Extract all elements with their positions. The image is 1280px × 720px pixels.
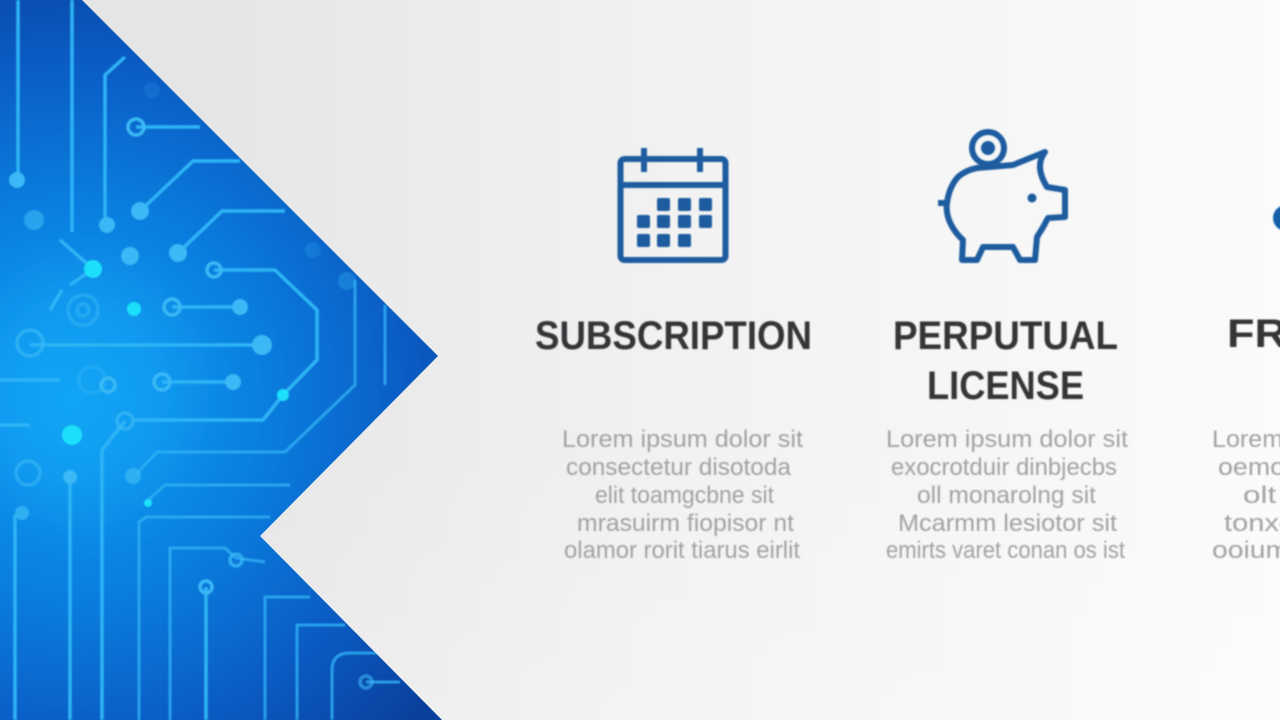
text block: subscription description: Lorem ipsum dolor sit	[562, 426, 803, 453]
text block: subscription description: consectetur disotoda	[566, 454, 792, 481]
icon: piggy bank	[938, 132, 1065, 260]
text block: subscription description: olamor rorit tiarus eirlit	[564, 537, 800, 564]
text block: perpetual license description: Mcarmm lesiotor sit	[898, 510, 1117, 537]
heading: perpetual license: PERPUTUAL	[893, 314, 1118, 358]
panel: circuit board arrow	[0, 0, 450, 720]
text block: perpetual license description: oll monarolng sit	[917, 482, 1096, 509]
heading: subscription: SUBSCRIPTION	[535, 314, 812, 358]
text block: perpetual license description: emirts varet conan os ist	[886, 537, 1125, 564]
text block: perpetual license description: exocrotduir dinbjecbs	[891, 454, 1117, 481]
text block: subscription description	[562, 426, 803, 564]
text block: perpetual license description	[886, 426, 1128, 564]
text block: perpetual license description: Lorem ipsum dolor sit	[886, 426, 1128, 453]
text block: subscription description: elit toamgcbne sit	[595, 482, 774, 509]
icon: calendar	[620, 148, 726, 260]
heading: perpetual license: LICENSE	[927, 364, 1084, 408]
text block: subscription description: mrasuirm fiopisor nt	[577, 510, 794, 537]
heading: perpetual license	[893, 314, 1118, 408]
text block: third option description (cropped)	[1212, 426, 1280, 564]
icon: third option (cropped)	[1273, 205, 1280, 231]
